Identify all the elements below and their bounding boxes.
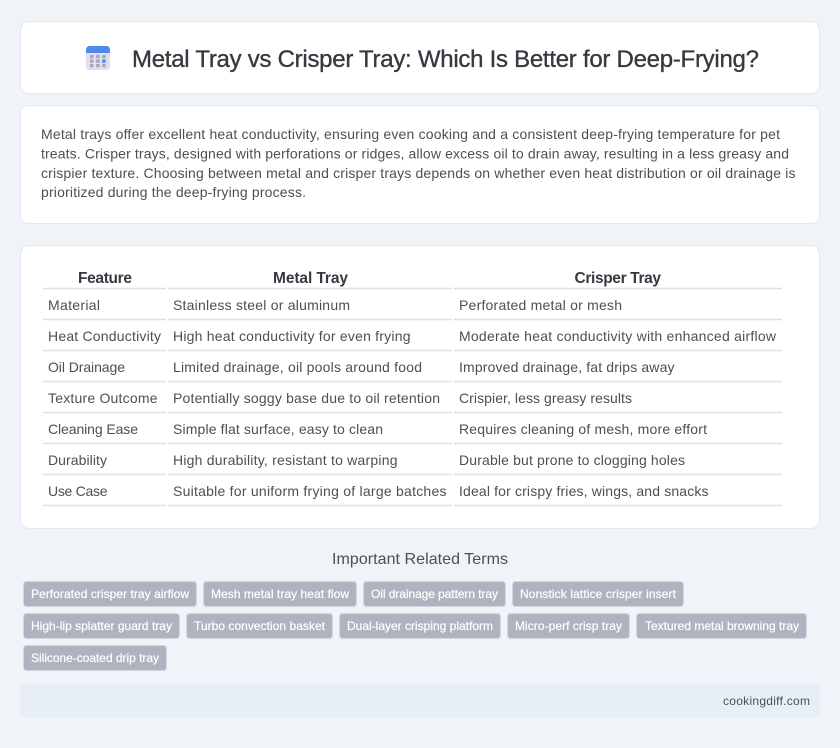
- row: use case: Suitable for uniform frying of large batches: [173, 483, 446, 499]
- row: material: [48, 297, 622, 313]
- tag: silicone-coated drip tray: [24, 646, 166, 670]
- panel: intro paragraph: [20, 106, 820, 224]
- icon: calendar tray: [86, 46, 110, 70]
- row: oil drainage: [48, 359, 674, 375]
- table header row: Metal Tray: [273, 270, 348, 287]
- row: material: Stainless steel or aluminum: [173, 297, 350, 313]
- intro text: Metal trays offer excellent heat conductivity, ensuring even cooking and a consistent deep-frying temperature for pet: [41, 126, 780, 142]
- row: cleaning ease: Cleaning Ease: [48, 421, 138, 437]
- row: heat conductivity: [48, 328, 777, 344]
- tag: high-lip splatter guard tray: [24, 614, 180, 638]
- row: heat conductivity: Heat Conductivity: [48, 328, 161, 344]
- row: texture outcome: Crispier, less greasy results: [459, 390, 632, 406]
- tag: high-lip splatter guard tray: High-lip splatter guard tray: [31, 619, 172, 633]
- row: cleaning ease: Requires cleaning of mesh, more effort: [459, 421, 707, 437]
- tag: perforated crisper tray airflow: [24, 582, 196, 606]
- row: texture outcome: Texture Outcome: [48, 390, 158, 406]
- table header row: [78, 270, 661, 287]
- footer source: cookingdiff.com: [723, 694, 810, 708]
- row: cleaning ease: Simple flat surface, easy to clean: [173, 421, 383, 437]
- tag: textured metal browning tray: [636, 614, 806, 638]
- row: use case: Ideal for crispy fries, wings, and snacks: [459, 483, 708, 499]
- panel: title header: [20, 22, 820, 94]
- row: cleaning ease: [48, 421, 707, 437]
- intro text: [41, 126, 796, 200]
- row: material: Material: [48, 297, 100, 313]
- tag: micro-perf crisp tray: [508, 614, 630, 638]
- tag: mesh metal tray heat flow: [204, 582, 356, 606]
- footer bar: [20, 684, 820, 718]
- tag: turbo convection basket: [186, 614, 332, 638]
- row: durability: [48, 452, 685, 468]
- row: use case: [48, 483, 708, 499]
- tag: turbo convection basket: Turbo convection basket: [194, 619, 326, 633]
- intro text: treats. Crisper trays, designed with perforations or ridges, allow excess oil to drain away, resulting in a less greasy and: [41, 146, 789, 162]
- tag: silicone-coated drip tray: Silicone-coated drip tray: [31, 651, 159, 665]
- tag list: related terms: [24, 582, 806, 670]
- tag: micro-perf crisp tray: Micro-perf crisp tray: [515, 619, 622, 633]
- row: durability: Durability: [48, 452, 107, 468]
- tag: nonstick lattice crisper insert: [512, 582, 684, 606]
- row: heat conductivity: High heat conductivity for even frying: [173, 328, 410, 344]
- row: oil drainage: Oil Drainage: [48, 359, 125, 375]
- tag: oil drainage pattern tray: [364, 582, 506, 606]
- row: use case: Use Case: [48, 483, 108, 499]
- row: durability: High durability, resistant to warping: [173, 452, 398, 468]
- tag: textured metal browning tray: Textured metal browning tray: [645, 619, 799, 633]
- intro text: prioritized during the deep-frying process.: [41, 184, 306, 200]
- row: material: Perforated metal or mesh: [459, 297, 622, 313]
- row: heat conductivity: Moderate heat conductivity with enhanced airflow: [459, 328, 777, 344]
- tag: perforated crisper tray airflow: Perforated crisper tray airflow: [31, 587, 189, 601]
- tag: mesh metal tray heat flow: Mesh metal tray heat flow: [211, 587, 349, 601]
- intro text: crispier texture. Choosing between metal and crisper trays depends on whether even heat distribution or oil drainage is: [41, 165, 796, 181]
- row: texture outcome: Potentially soggy base due to oil retention: [173, 390, 440, 406]
- title: Metal Tray vs Crisper Tray: Which Is Better for Deep-Frying?: [132, 46, 759, 73]
- tag: dual-layer crisping platform: [340, 614, 500, 638]
- tag: oil drainage pattern tray: Oil drainage pattern tray: [371, 587, 498, 601]
- table header row: Feature: [78, 270, 132, 287]
- tag: dual-layer crisping platform: Dual-layer crisping platform: [347, 619, 493, 633]
- row: texture outcome: [48, 390, 632, 406]
- panel: comparison table: [20, 246, 820, 528]
- tag: nonstick lattice crisper insert: Nonstick lattice crisper insert: [520, 587, 677, 601]
- table header row: Crisper Tray: [574, 270, 661, 287]
- row: oil drainage: Improved drainage, fat drips away: [459, 359, 674, 375]
- row: oil drainage: Limited drainage, oil pools around food: [173, 359, 422, 375]
- heading: related terms: Important Related Terms: [332, 551, 508, 568]
- row: durability: Durable but prone to clogging holes: [459, 452, 685, 468]
